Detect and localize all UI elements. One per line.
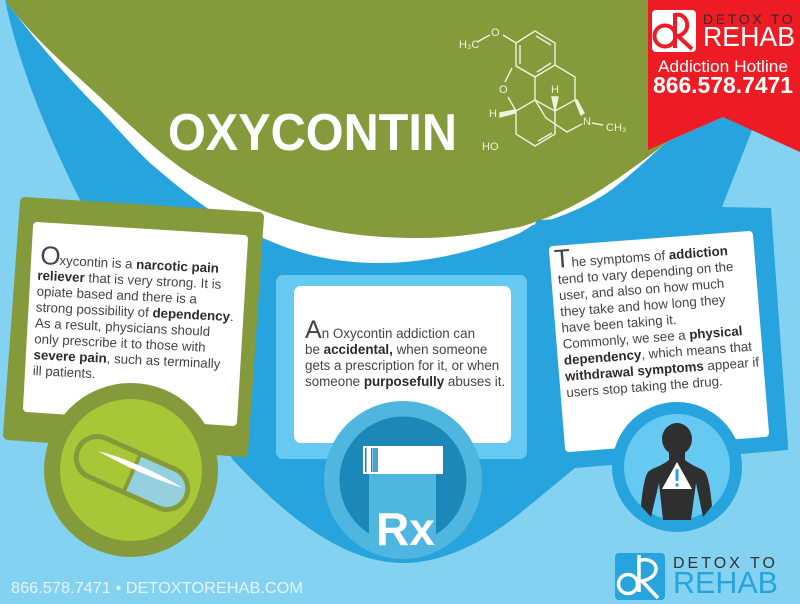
title: OXYCONTIN xyxy=(168,104,457,162)
text: description xyxy=(32,240,237,388)
icon: molecule structure: H xyxy=(489,108,497,120)
green header shape xyxy=(5,0,680,238)
footer wordmark: DETOX TO xyxy=(673,555,778,572)
text: description: severe pain, such as terminally xyxy=(33,347,221,371)
footer wordmark rehab: REHAB xyxy=(673,565,778,600)
footer logo xyxy=(615,553,778,600)
text: symptoms: Commonly, we see a physical xyxy=(562,323,743,352)
text: symptoms: withdrawal symptoms appear if xyxy=(564,354,760,384)
text: symptoms: they take and how long they xyxy=(560,292,726,319)
hotline number: 866.578.7471 xyxy=(653,72,793,98)
text: symptoms xyxy=(553,229,761,400)
text: symptoms: users stop taking the drug. xyxy=(566,373,723,400)
text: description: strong possibility of dependency. xyxy=(36,300,234,324)
text: symptoms: dependency, which means that xyxy=(563,339,753,368)
icon: pill in green circle xyxy=(44,383,218,557)
red hotline banner xyxy=(648,0,800,152)
text: addiction: gets a prescription for it, or when xyxy=(305,358,499,373)
text: symptoms: he symptoms of addiction xyxy=(571,243,728,270)
text: addiction: someone purposefully abuses it. xyxy=(305,374,505,389)
icon: molecule structure: CH₃ xyxy=(606,122,626,134)
text: description: ill patients. xyxy=(32,363,96,381)
text: description: O xyxy=(40,240,61,271)
text: description: reliever that is very strong. It is xyxy=(37,268,222,292)
text: description: only prescribe it to those with xyxy=(34,331,206,355)
text: description: opiate based and there is a xyxy=(36,284,198,307)
icon: person with warning sign xyxy=(612,402,742,532)
text: symptoms: have been taking it. xyxy=(561,312,677,335)
text: addiction: be accidental, when someone xyxy=(305,342,487,357)
text: addiction: An Oxycontin addiction can xyxy=(305,316,475,344)
text: symptoms: user, and also on how much xyxy=(559,276,725,303)
white swoosh band xyxy=(5,0,667,263)
icon: molecule structure: HO xyxy=(482,141,499,153)
logo wordmark: DETOX TO xyxy=(703,11,795,27)
icon: molecule structure: H₃C xyxy=(459,39,479,51)
panel: accidental addiction (blue) xyxy=(276,275,527,459)
icon: molecule structure: N xyxy=(583,116,591,128)
text: symptoms: tend to vary depending on the xyxy=(557,259,734,287)
text: addiction xyxy=(305,316,505,389)
icon: prescription bottle in circle: Rx xyxy=(376,503,435,555)
icon: molecule structure xyxy=(459,27,626,153)
icon: molecule structure: O xyxy=(499,84,508,96)
icon: molecule structure: O xyxy=(491,27,500,39)
panel: what it is (green) xyxy=(8,202,259,452)
text: description: xycontin is a narcotic pain xyxy=(59,253,219,276)
hotline label: Addiction Hotline xyxy=(658,58,788,76)
icon: molecule structure: H xyxy=(551,84,559,96)
text: description: As a result, physicians should xyxy=(35,315,210,339)
text: symptoms: T xyxy=(553,243,571,274)
footer contact line: 866.578.7471 • DETOXTOREHAB.COM xyxy=(11,580,303,597)
logo wordmark rehab: REHAB xyxy=(703,21,795,52)
icon: prescription bottle in circle xyxy=(324,401,482,559)
logo: red badge xyxy=(652,10,696,52)
panel: symptoms (blue) xyxy=(540,213,783,458)
